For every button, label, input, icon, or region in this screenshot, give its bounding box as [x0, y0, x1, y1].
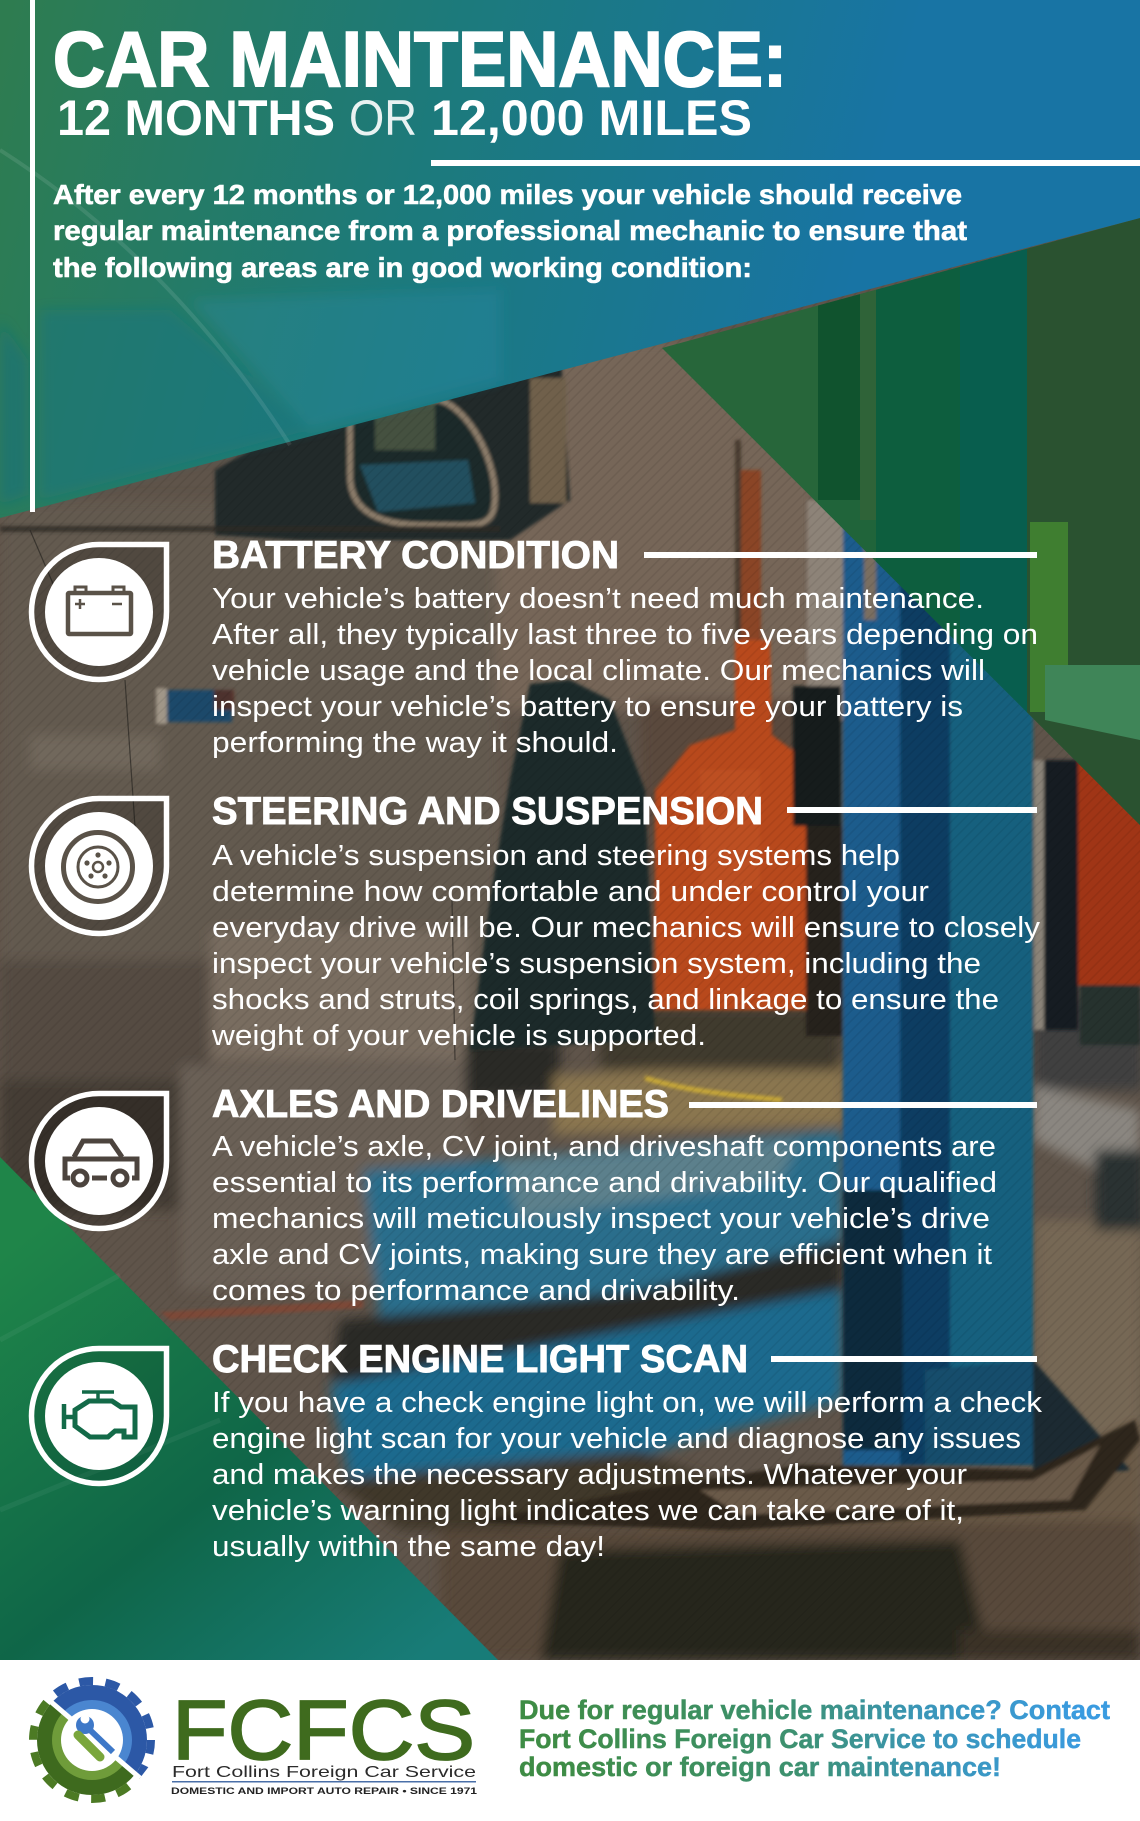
body text [212, 1387, 1043, 1563]
logo gear icon [33, 1681, 151, 1799]
logo tagline: DOMESTIC AND IMPORT AUTO REPAIR • SINCE 1971 [171, 1786, 478, 1797]
body text: A vehicle’s axle, CV joint, and driveshaft components are [212, 1131, 996, 1163]
body text: engine light scan for your vehicle and diagnose any issues [212, 1423, 1021, 1455]
body text [212, 1131, 997, 1307]
body text: If you have a check engine light on, we will perform a check [212, 1387, 1043, 1419]
panel: axles and drivelines [32, 1083, 1037, 1307]
heading: BATTERY CONDITION [212, 534, 619, 577]
green tinted triangle, upper right [662, 218, 1140, 825]
intro text [53, 179, 967, 283]
body text: determine how comfortable and under control your [212, 876, 929, 908]
body text: After all, they typically last three to five years depending on [212, 619, 1038, 651]
body text: Your vehicle’s battery doesn’t need much maintenance. [212, 583, 984, 615]
blue-green gradient header panel [0, 0, 1140, 518]
body text: everyday drive will be. Our mechanics will ensure to closely [212, 912, 1041, 944]
title: 12,000 MILES [431, 90, 752, 146]
footer call to action: Fort Collins Foreign Car Service to schedule [519, 1724, 1081, 1754]
icon: battery [32, 544, 167, 680]
body text: shocks and struts, coil springs, and linkage to ensure the [212, 984, 999, 1016]
logo: FCFCS [33, 1681, 478, 1799]
footer call to action: Due for regular vehicle maintenance? Contact [519, 1695, 1110, 1725]
body text: weight of your vehicle is supported. [211, 1020, 706, 1052]
body text: vehicle’s warning light indicates we can take care of it, [212, 1495, 964, 1527]
footer call to action: domestic or foreign car maintenance! [519, 1752, 1001, 1782]
panel: check engine light scan [32, 1338, 1043, 1563]
intro text: After every 12 months or 12,000 miles your vehicle should receive [53, 179, 962, 210]
vertical white rule [30, 0, 35, 512]
logo company name: Fort Collins Foreign Car Service [172, 1764, 476, 1781]
body text: performing the way it should. [212, 727, 618, 759]
panel: battery condition [32, 534, 1038, 759]
title: 12 MONTHS [57, 90, 335, 146]
panel: steering and suspension [32, 790, 1041, 1052]
heading: AXLES AND DRIVELINES [212, 1083, 669, 1126]
title [53, 15, 787, 146]
body text: inspect your vehicle’s suspension system, including the [212, 948, 981, 980]
title: OR [349, 90, 417, 146]
body text [212, 583, 1038, 759]
body text: A vehicle’s suspension and steering systems help [212, 840, 900, 872]
icon: engine [32, 1348, 167, 1484]
heading: CHECK ENGINE LIGHT SCAN [212, 1338, 748, 1381]
body text: and makes the necessary adjustments. Whatever your [212, 1459, 967, 1491]
body text: mechanics will meticulously inspect your vehicle’s drive [212, 1203, 990, 1235]
body text: essential to its performance and drivability. Our qualified [212, 1167, 997, 1199]
green-teal triangle, lower left [0, 1157, 498, 1660]
body text: axle and CV joints, making sure they are efficient when it [212, 1239, 992, 1271]
icon: car [32, 1094, 167, 1228]
icon: wheel [32, 798, 167, 933]
body text [211, 840, 1041, 1052]
body text: inspect your vehicle’s battery to ensure your battery is [212, 691, 963, 723]
body text: comes to performance and drivability. [212, 1275, 740, 1307]
title: CAR MAINTENANCE: [53, 15, 787, 103]
intro text: the following areas are in good working condition: [53, 252, 752, 283]
body text: vehicle usage and the local climate. Our mechanics will [212, 655, 985, 687]
white footer band [0, 1660, 1140, 1821]
logo wordmark: FCFCS [172, 1683, 475, 1777]
footer call to action [519, 1695, 1110, 1782]
body text: usually within the same day! [212, 1531, 605, 1563]
intro text: regular maintenance from a professional mechanic to ensure that [53, 215, 967, 246]
heading: STEERING AND SUSPENSION [212, 790, 763, 833]
